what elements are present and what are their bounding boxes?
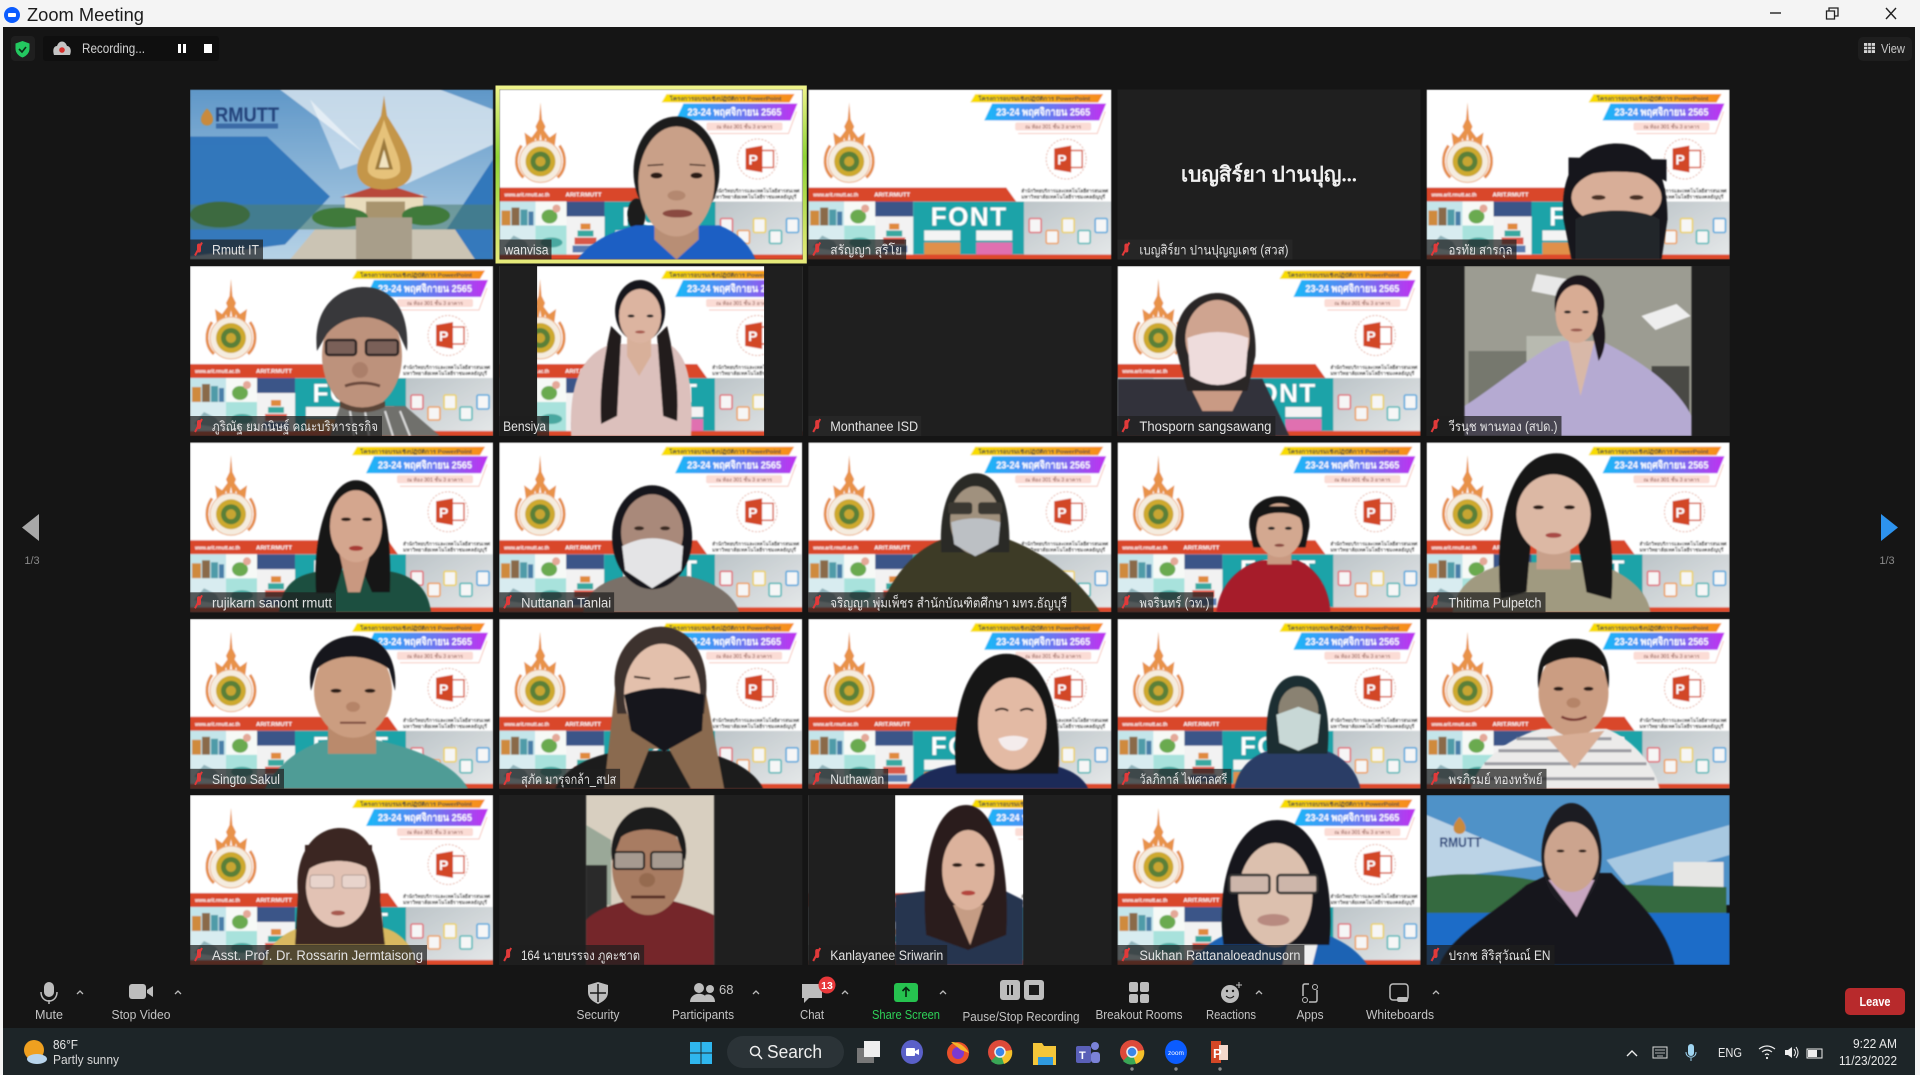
person: Bensiya (571, 280, 692, 436)
person: striped shirt (1470, 639, 1660, 789)
slide background (1426, 619, 1730, 789)
slide background (1117, 266, 1421, 436)
recording indicator: Recording... (82, 40, 145, 56)
weather widget: 86°F (53, 1038, 78, 1052)
slide background (190, 442, 493, 612)
name tag: วีรนุช พานทอง (สปด.) (1448, 419, 1557, 435)
toolbar: share screen: Share Screen (872, 1007, 940, 1022)
tile: Thitima Pulpetch (1426, 442, 1730, 612)
person: white mask (583, 485, 739, 612)
name tag (499, 945, 644, 965)
recording indicator (43, 36, 219, 61)
tile: สรัญญา สุริโย (808, 90, 1112, 260)
person: dark clothes, mask (878, 473, 1100, 612)
slide background (499, 442, 802, 612)
name tag: เบญสิร์ยา ปานปุญญเดช (สวส) (1139, 242, 1288, 258)
name tag: Singto Sakul (212, 772, 280, 787)
name tag (499, 592, 614, 612)
previous page arrow (22, 514, 40, 567)
name tag (808, 592, 1071, 612)
toolbar: chat with badge (800, 976, 848, 1022)
name tag (1117, 592, 1213, 612)
title bar (0, 0, 1920, 27)
security shield icon (11, 36, 35, 61)
slide background (808, 90, 1112, 260)
person: rujikarn (279, 480, 431, 612)
toolbar: pause/stop recording: Pause/Stop Recording (962, 1009, 1080, 1024)
name tag (1426, 945, 1554, 965)
name tag (1117, 240, 1292, 260)
name tag (1117, 945, 1304, 965)
title bar: Zoom Meeting (27, 5, 144, 25)
next page arrow (1879, 514, 1898, 567)
name tag (808, 945, 947, 965)
tile: 164 นายบรรจง ภูคะชาต (500, 795, 802, 965)
system tray: 11/23/2022 (1839, 1054, 1897, 1068)
name tag (808, 769, 888, 789)
view button (1858, 37, 1912, 61)
toolbar: chat with badge: Chat (800, 1007, 824, 1022)
toolbar: participants (672, 982, 759, 1022)
slide background (1117, 442, 1421, 612)
name tag (190, 416, 382, 436)
tile: Sukhan Rattanaloeadnusorn (1117, 795, 1421, 965)
toolbar: participants: Participants (672, 1007, 734, 1022)
name tag: rujikarn sanont rmutt (212, 595, 332, 610)
name tag (808, 240, 906, 260)
toolbar: whiteboards: Whiteboards (1366, 1007, 1434, 1022)
toolbar: breakout rooms: Breakout Rooms (1096, 1007, 1183, 1022)
person: black top (1440, 803, 1674, 965)
slide background (190, 266, 493, 436)
toolbar: apps: Apps (1296, 1007, 1324, 1022)
taskbar app icons: P (1213, 1046, 1222, 1061)
taskbar app icons: zoom (1168, 1050, 1184, 1057)
windows taskbar (0, 1028, 1920, 1075)
name tag: Bensiya (503, 419, 547, 434)
tile: วัลภิกาล์ ไพศาลศรี (1117, 618, 1421, 789)
taskbar search: Search (767, 1042, 822, 1062)
name tag (499, 416, 549, 436)
toolbar: mute: Mute (35, 1007, 63, 1022)
view button: View (1881, 41, 1906, 56)
toolbar: reactions (1206, 982, 1262, 1022)
name tag: Thosporn sangsawang (1139, 419, 1271, 434)
toolbar: participants: 68 (719, 982, 733, 997)
slide background (500, 90, 803, 260)
taskbar search (727, 1036, 844, 1068)
leave button (1845, 988, 1905, 1015)
toolbar: pause/stop recording (962, 980, 1080, 1024)
name tag (499, 769, 620, 789)
slide background (1117, 619, 1421, 789)
name tag (1117, 769, 1231, 789)
name tag: Thitima Pulpetch (1448, 595, 1542, 610)
tile: อรทัย สารกุล (1426, 90, 1730, 260)
slide background (190, 619, 493, 789)
name tag: Nuthawan (830, 772, 884, 787)
slide background (808, 795, 1112, 965)
name tag: สรัญญา สุริโย (830, 242, 902, 258)
tile: Nuttanan Tanlai (499, 442, 802, 612)
name tag: Rmutt IT (212, 242, 259, 258)
next page arrow: 1/3 (1879, 555, 1895, 567)
name tag: พจรินทร์ (วท.) (1139, 594, 1209, 610)
tile: Singto Sakul (190, 618, 494, 789)
pillarbox bars (499, 266, 802, 436)
office video (1464, 266, 1692, 436)
tile: จริญญา พุ่มเพ็ชร (808, 442, 1112, 612)
slide background (499, 266, 802, 436)
tile: สุภัค มารุจกล้า_สปส (499, 618, 802, 789)
toolbar: apps (1296, 984, 1324, 1022)
campus background: RMUTT (1440, 834, 1482, 850)
toolbar: share screen (872, 983, 946, 1022)
name tag (500, 240, 552, 260)
toolbar: whiteboards (1366, 984, 1439, 1022)
tile: Monthanee ISD (808, 266, 1112, 436)
person: Rossarin (262, 828, 416, 965)
name tag: พรภิรมย์ ทองทรัพย์ (1448, 771, 1542, 787)
tile: wanvisa active speaker (496, 86, 807, 264)
person: mint mask (1234, 676, 1360, 789)
name tag: จริญญา พุ่มเพ็ชร สำนักบัณฑิตศึกษา มทร.ธัญบุรี (830, 593, 1067, 611)
person: Singto (265, 636, 468, 789)
name tag (190, 945, 427, 965)
tile: พรภิรมย์ ทองทรัพย์ (1426, 618, 1730, 789)
tile: camera off, display name (1118, 90, 1420, 260)
toolbar: chat with badge: 13 (821, 980, 833, 992)
name tag (190, 769, 284, 789)
system tray: 9:22 AM (1853, 1037, 1897, 1051)
slide background (1426, 90, 1730, 260)
active speaker border (498, 88, 805, 262)
person: Thitima (1452, 453, 1650, 612)
toolbar: stop video (112, 984, 181, 1022)
slide background (1426, 442, 1730, 612)
person: black mask (1563, 144, 1668, 260)
name tag: Nuttanan Tanlai (521, 595, 611, 610)
start button (690, 1042, 712, 1064)
tile: ภูริณัฐ ยมกนิษฐ์ (190, 266, 494, 436)
tile: Bensiya (499, 266, 802, 436)
name tag: สุภัค มารุจกล้า_สปส (521, 772, 616, 788)
toolbar: reactions: Reactions (1206, 1007, 1256, 1022)
name tag: อรทัย สารกุล (1448, 242, 1512, 258)
person: pink mask (1117, 293, 1289, 436)
name tag (808, 416, 921, 436)
weather widget: Partly sunny (53, 1053, 120, 1067)
tile: rujikarn sanont rmutt (190, 442, 494, 612)
toolbar: security (576, 982, 620, 1022)
taskbar app icons: T (1079, 1050, 1086, 1062)
person: man with glasses (316, 287, 440, 436)
campus stupa background (190, 90, 493, 260)
tile: พจรินทร์ (วท.) (1117, 442, 1421, 612)
slide background (808, 619, 1112, 789)
tile: Nuthawan (808, 618, 1112, 789)
name tag: วัลภิกาล์ ไพศาลศรี (1139, 771, 1227, 787)
name tag: ภูริณัฐ ยมกนิษฐ์ คณะบริหารธุรกิจ (212, 418, 378, 435)
large display name: เบญสิร์ยา ปานปุญ... (1181, 162, 1357, 188)
system tray: ENG (1718, 1046, 1742, 1060)
person video (586, 795, 714, 965)
tile: ปรกช สิริสุวัณณ์ EN (1426, 795, 1730, 965)
person: Nuthawan smiling (908, 654, 1088, 789)
slide background (808, 442, 1112, 612)
name tag: Monthanee ISD (830, 419, 918, 434)
name tag: ปรกช สิริสุวัณณ์ EN (1448, 947, 1550, 964)
name tag: Sukhan Rattanaloeadnusorn (1139, 948, 1300, 963)
tile: วีรนุช พานทอง (1426, 266, 1730, 436)
name tag (1426, 240, 1516, 260)
person: Kanlayanee (895, 805, 1023, 965)
name tag (1117, 416, 1275, 436)
person: red shirt (1216, 496, 1330, 612)
name tag (1426, 592, 1546, 612)
name tag: 164 นายบรรจง ภูคะชาต (521, 948, 640, 964)
person: wanvisa (578, 116, 756, 260)
campus background (1426, 795, 1730, 965)
name tag: wanvisa (504, 242, 549, 258)
name tag (190, 240, 263, 260)
name tag (1426, 416, 1562, 436)
toolbar: stop video: Stop Video (112, 1007, 170, 1022)
RMUTT logo: RMUTT (215, 104, 279, 126)
previous page arrow: 1/3 (24, 555, 40, 567)
pillarbox bars (808, 795, 1112, 965)
slide background (499, 619, 802, 789)
tile: Rmutt IT (190, 90, 494, 260)
slide background (1117, 795, 1421, 965)
weather widget (24, 1038, 120, 1067)
name tag (1426, 769, 1546, 789)
person: Sukhan (1191, 820, 1367, 965)
toolbar: mute (35, 982, 83, 1022)
name tag: Kanlayanee Sriwarin (830, 948, 943, 963)
toolbar: breakout rooms (1096, 982, 1183, 1022)
system tray (1627, 1037, 1897, 1068)
tile: Kanlayanee Sriwarin (808, 795, 1112, 965)
toolbar: security: Security (576, 1007, 620, 1022)
slide background (190, 795, 493, 965)
taskbar app icons (857, 1040, 1228, 1071)
tile: Thosporn sangsawang (1117, 266, 1421, 436)
tile: Asst. Prof. Dr. Rossarin Jermtaisong (190, 795, 494, 965)
name tag (190, 592, 336, 612)
name tag: Asst. Prof. Dr. Rossarin Jermtaisong (212, 948, 423, 963)
leave button: Leave (1860, 994, 1890, 1009)
person: black mask (555, 627, 763, 789)
